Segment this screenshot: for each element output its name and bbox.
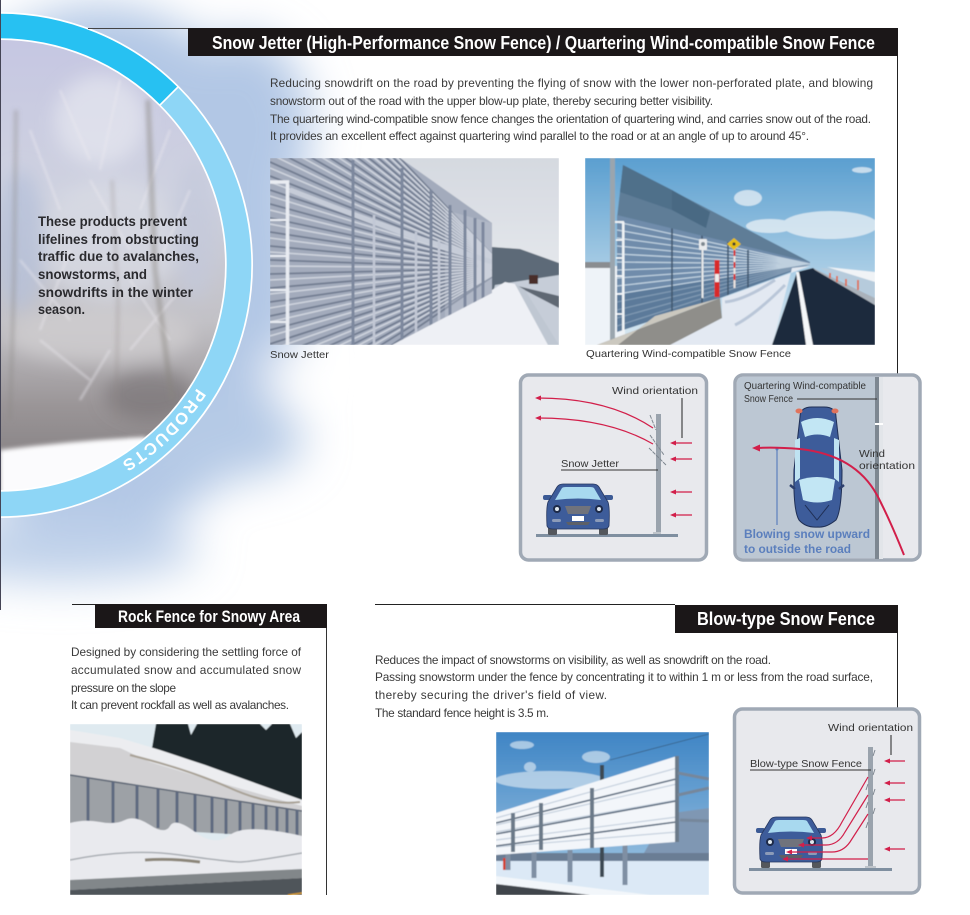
photo: Quartering Wind-compatible Snow Fence <box>585 158 875 345</box>
label: Snow Jetter <box>561 458 658 470</box>
label: fence name: Snow Fence <box>744 393 793 405</box>
text block: Snow Jetter description: snowstorm out of the road with the upper blow-up plate, thereby securing better visibility. <box>270 94 713 108</box>
fence <box>875 377 883 559</box>
intro text: These products prevent <box>38 214 187 229</box>
text block: Rock Fence description: Designed by considering the settling force of <box>71 645 302 659</box>
photo: Rock Fence <box>70 724 302 895</box>
title: Snow Jetter <box>88 28 898 56</box>
intro text: snowstorms, and <box>38 267 147 282</box>
intro text: traffic due to avalanches, <box>38 249 199 264</box>
car <box>756 817 826 868</box>
label: Blow-type Snow Fence: Blow-type Snow Fence <box>750 758 862 770</box>
label: wind orientation: Wind <box>859 448 885 460</box>
label: blowing snow <box>744 527 870 556</box>
road <box>749 868 892 871</box>
text block: Blow-type description <box>375 653 873 720</box>
wind arrows <box>782 758 905 862</box>
circle background winter photo <box>1 40 225 490</box>
photo: Snow Jetter <box>270 158 559 345</box>
heading: Blow-type Snow Fence: Blow-type Snow Fence <box>697 609 875 629</box>
wind arrows <box>535 396 692 518</box>
text block: Snow Jetter description <box>270 76 873 143</box>
text block: Rock Fence description: accumulated snow and accumulated snow <box>71 663 301 677</box>
text block: Rock Fence description: pressure on the slope <box>71 681 176 695</box>
blowing snow arrow <box>752 444 904 555</box>
intro text: lifelines from obstructing <box>38 232 199 247</box>
text block: Snow Jetter description: It provides an excellent effect against quartering wind parallel to the road or at an angle of up to around 45°. <box>270 129 809 143</box>
intro text: snowdrifts in the winter <box>38 285 194 300</box>
panel: products circle <box>1 12 253 518</box>
label: blowing snow: Blowing snow upward <box>744 527 870 541</box>
diagram: Snow Jetter wind <box>520 375 706 560</box>
text block: Blow-type description: thereby securing the driver's field of view. <box>375 688 607 702</box>
diagram: Quartering wind top view <box>735 375 920 560</box>
heading: Rock Fence for Snowy Area: Rock Fence for Snowy Area <box>118 608 301 626</box>
fence post <box>649 414 666 534</box>
heading: Blow-type Snow Fence <box>375 604 898 633</box>
label: blowing snow: to outside the road <box>744 542 851 556</box>
car <box>543 484 613 535</box>
text block: Rock Fence description <box>71 645 302 712</box>
caption: Snow Jetter: Snow Jetter <box>270 349 330 361</box>
text block: Snow Jetter description: The quartering wind-compatible snow fence changes the orientation of quartering wind, and carries snow out of the road. <box>270 112 871 126</box>
text block: Snow Jetter description: Reducing snowdrift on the road by preventing the flying of snow with the lower non-perforated plate, and blowing <box>270 76 873 90</box>
intro text <box>38 214 199 317</box>
heading: Rock Fence for Snowy Area <box>72 604 327 628</box>
car top view <box>790 407 844 527</box>
intro text: season. <box>38 302 85 317</box>
label: wind orientation <box>612 385 698 438</box>
text block: Rock Fence description: It can prevent rockfall as well as avalanches. <box>71 698 289 712</box>
title: Snow Jetter: Snow Jetter (High-Performance Snow Fence) / Quartering Wind-compatible Snow Fence <box>212 33 875 53</box>
ring label: PRODUCTS: PRODUCTS <box>124 388 206 470</box>
ring <box>0 26 239 504</box>
label: fence name <box>744 380 877 405</box>
road <box>536 534 678 537</box>
label: wind orientation <box>859 448 915 472</box>
label: wind orientation: orientation <box>859 460 915 472</box>
caption: Quartering Wind-compatible Snow Fence: Quartering Wind-compatible Snow Fence <box>586 348 791 360</box>
text block: Blow-type description: The standard fence height is 3.5 m. <box>375 706 549 720</box>
label: wind orientation <box>828 722 913 755</box>
text block: Blow-type description: Reduces the impact of snowstorms on visibility, as well as snowdrift on the road. <box>375 653 771 667</box>
text block: Blow-type description: Passing snowstorm under the fence by concentrating it to within 1 m or less from the road surface, <box>375 670 873 684</box>
label: wind orientation: Wind orientation <box>828 722 913 734</box>
label: wind orientation: Wind orientation <box>612 385 698 397</box>
label: fence name: Quartering Wind-compatible <box>744 380 866 392</box>
photo: Blow-type Snow Fence <box>496 732 709 895</box>
fence post <box>865 747 876 868</box>
label: Snow Jetter: Snow Jetter <box>561 458 620 470</box>
diagram: Blow-type wind <box>734 709 920 893</box>
